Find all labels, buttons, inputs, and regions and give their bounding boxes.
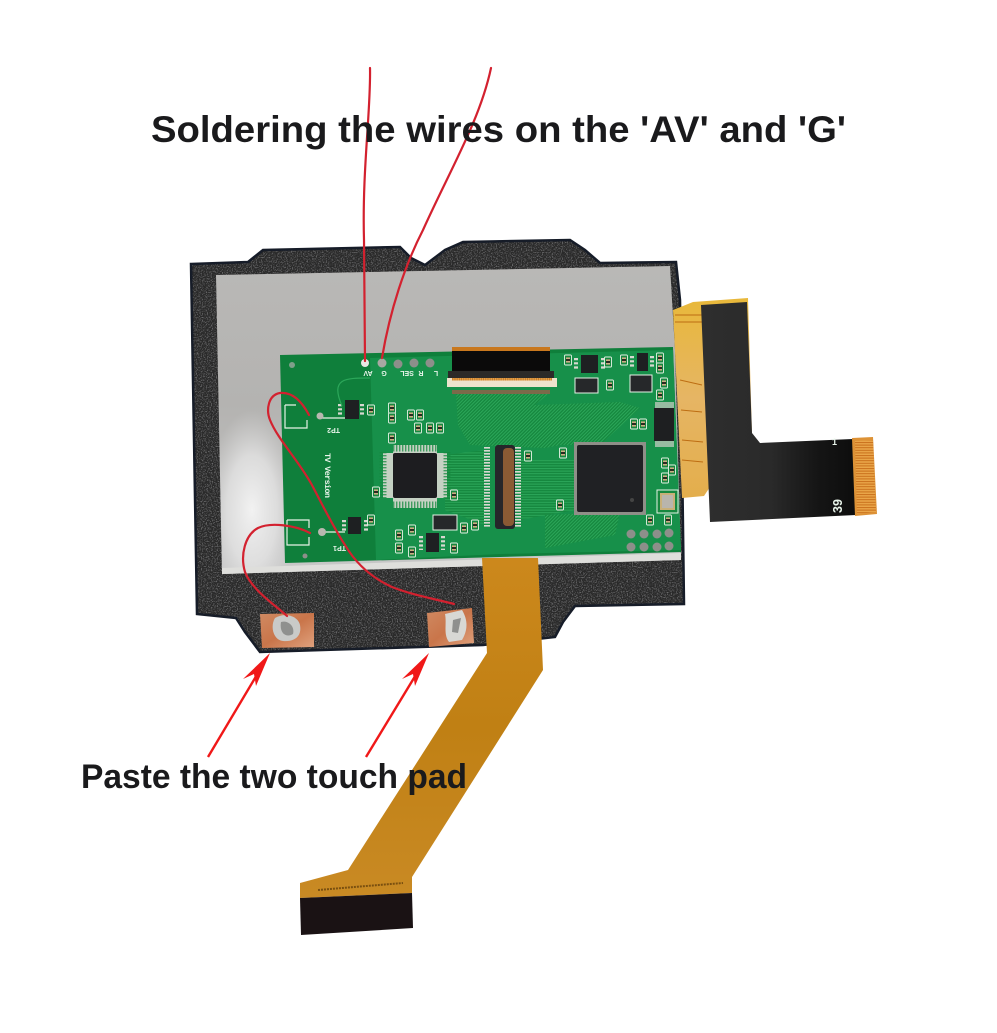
felt backing panel — [191, 240, 684, 652]
header pad labels: G — [381, 369, 387, 376]
black stiffener — [300, 893, 413, 935]
right SOP chip — [654, 402, 674, 447]
metal shield plate — [216, 266, 681, 574]
crystal oscillator — [657, 490, 678, 513]
right black flex cable — [701, 302, 877, 522]
top header pads — [361, 358, 434, 368]
small QFP chip — [383, 445, 447, 508]
label: touch pad: Paste the two touch pad — [81, 758, 467, 796]
orange ribbon cable — [300, 558, 543, 935]
copper touch pads — [260, 608, 474, 648]
yellow flex behind right connector — [673, 298, 752, 498]
solder line — [318, 883, 403, 890]
grey test pads — [626, 528, 674, 552]
SMD components — [368, 353, 676, 557]
pad outlines on left — [285, 378, 370, 545]
header pad labels — [363, 369, 438, 376]
left pad — [260, 613, 314, 648]
printed number 1: 1 — [832, 437, 837, 447]
inductors and small ICs — [433, 375, 652, 530]
trace fan areas — [456, 394, 640, 448]
large QFP chip — [574, 442, 646, 515]
header pad labels: L — [433, 369, 438, 376]
copper fingers — [852, 437, 877, 516]
IC leads — [340, 356, 652, 550]
printed number 39: 39 — [831, 499, 845, 513]
TP labels — [327, 426, 346, 551]
arrow: right touch pad — [366, 653, 429, 757]
header pad labels: AV — [363, 369, 373, 376]
heading: soldering: Soldering the wires on the 'AV' and 'G' — [151, 108, 846, 150]
TP labels: TP1 — [333, 544, 346, 551]
TV Version label: TV Version — [322, 453, 332, 498]
arrow: left touch pad — [208, 653, 270, 757]
top ZIF connector — [447, 347, 557, 394]
right pad — [427, 608, 474, 647]
header pad labels: SEL — [399, 369, 414, 376]
solder joints — [289, 362, 326, 558]
vertical FPC connector — [487, 445, 518, 529]
TP labels: TP2 — [327, 426, 340, 433]
header pad labels: R — [418, 369, 424, 376]
red wires — [243, 68, 491, 616]
green circuit board — [280, 347, 681, 563]
